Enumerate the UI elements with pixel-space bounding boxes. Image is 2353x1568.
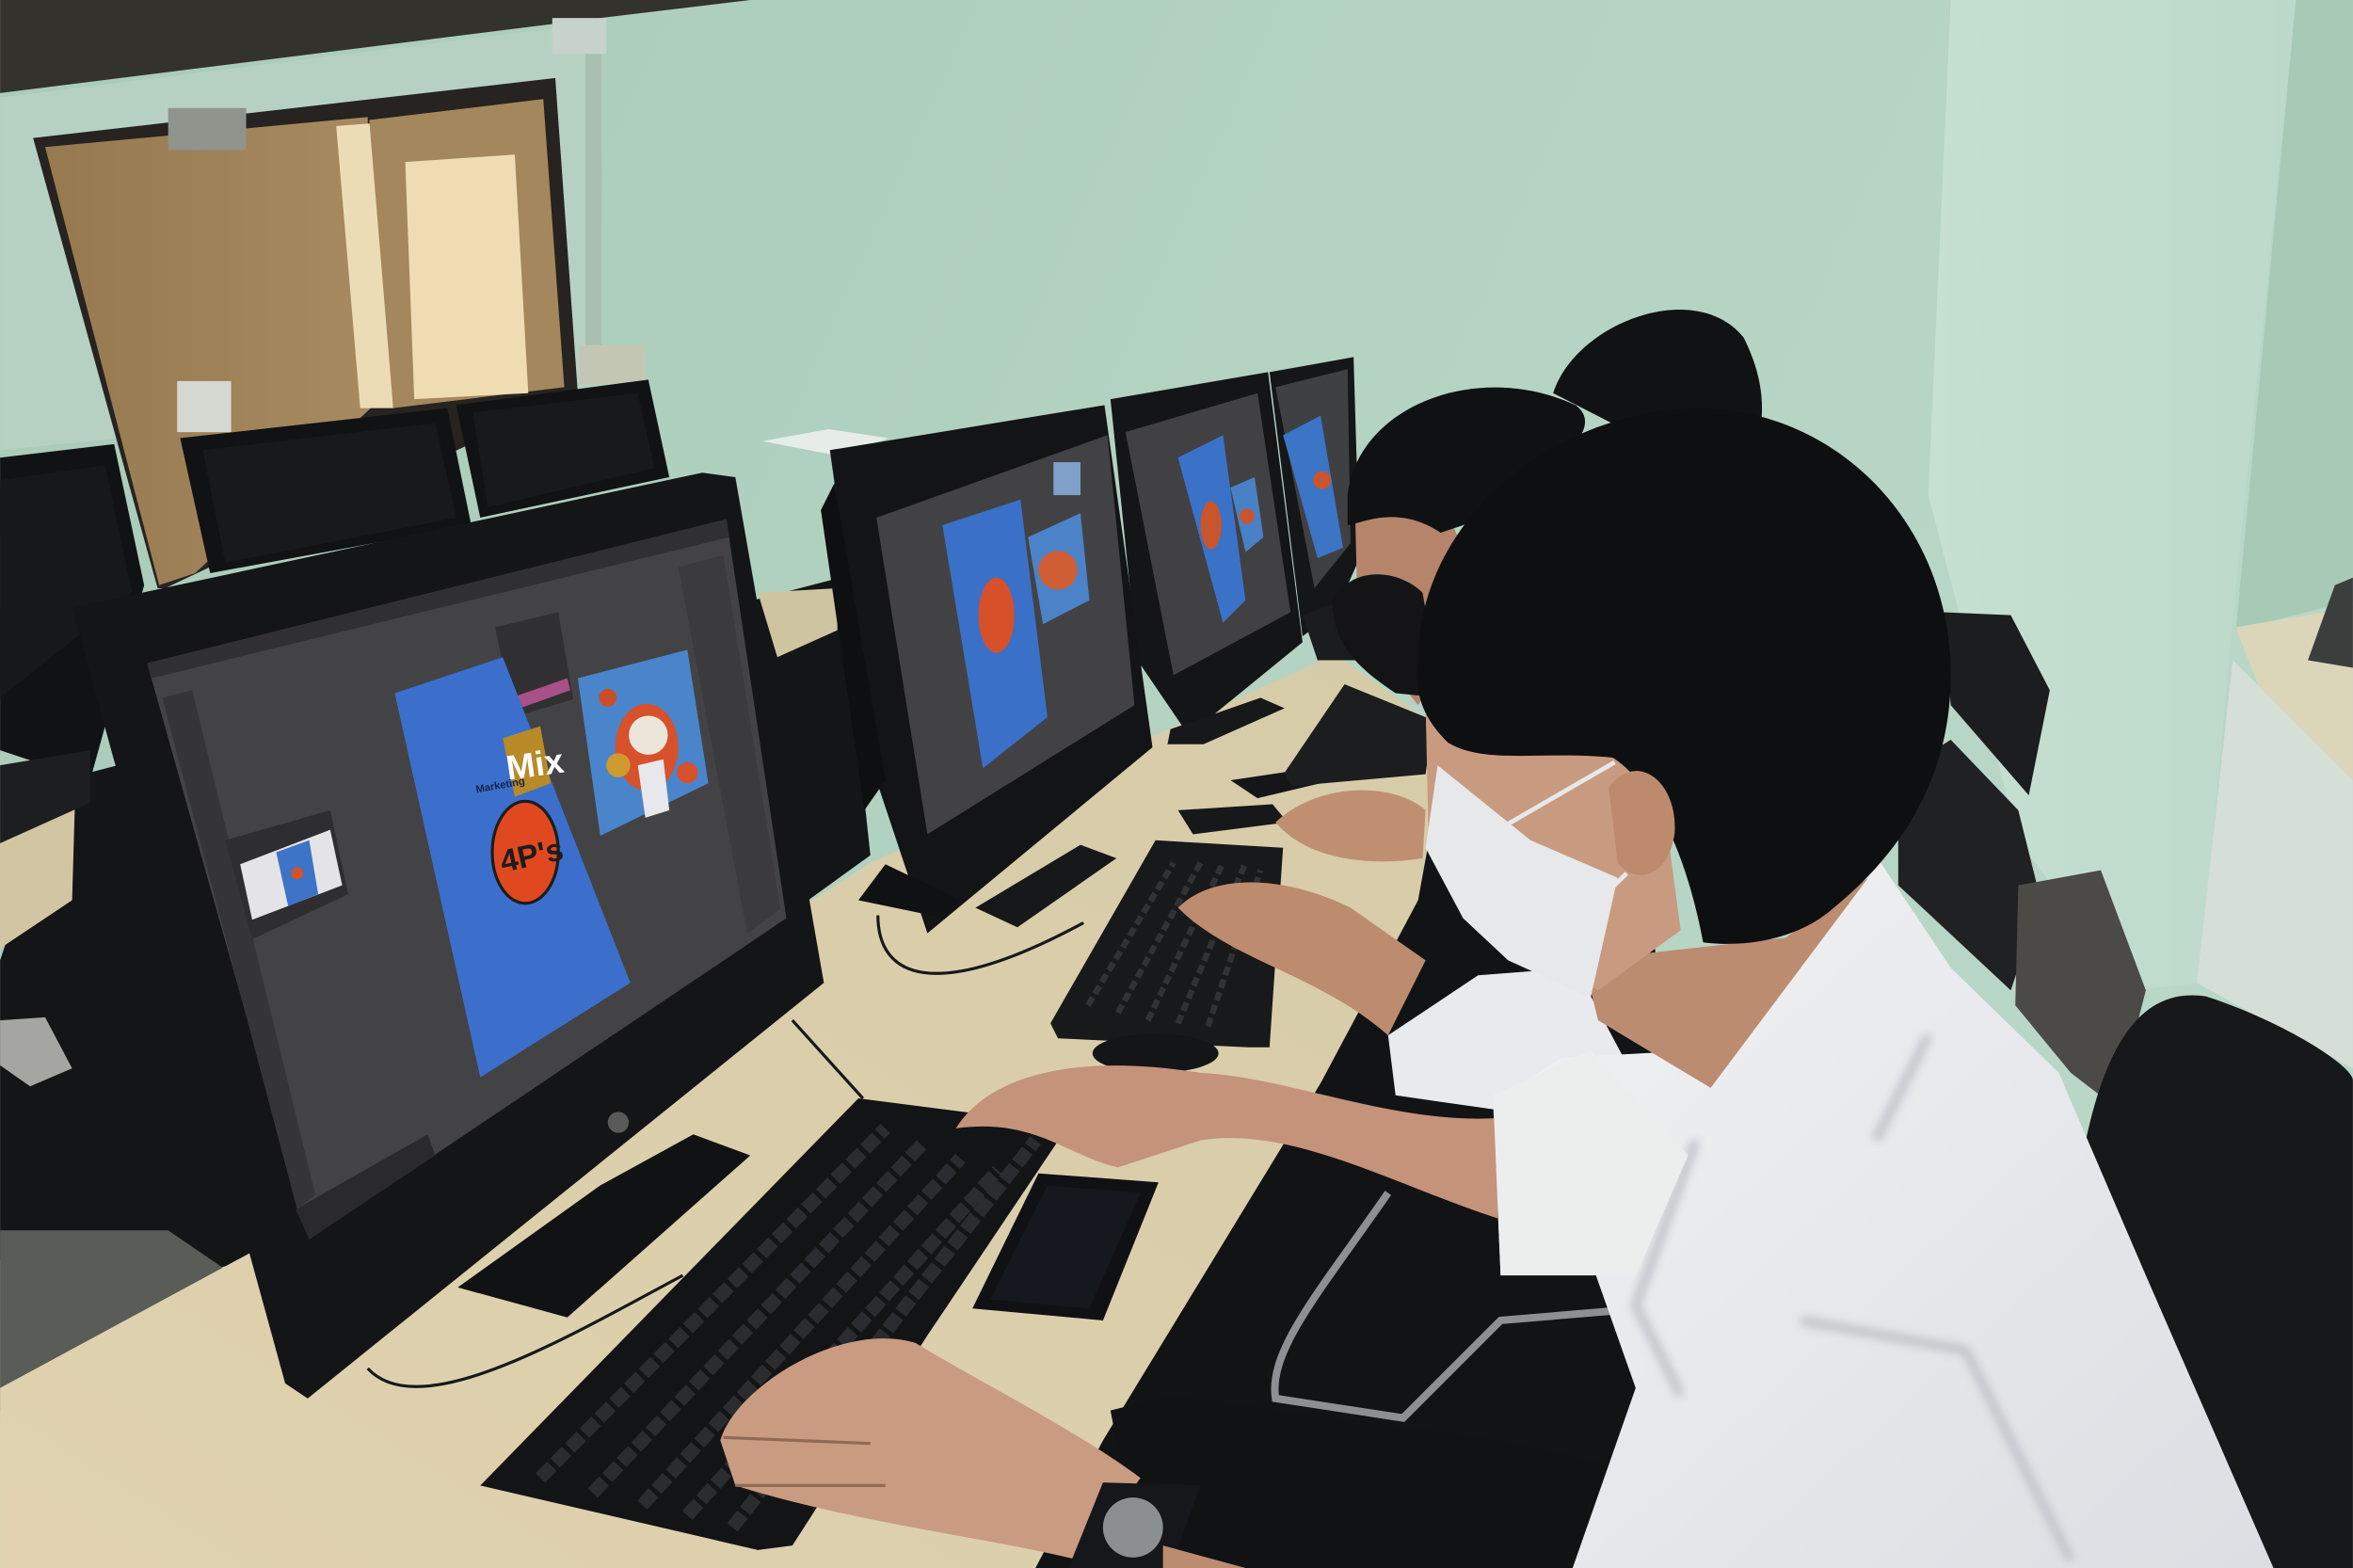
third student hair — [1553, 310, 1762, 427]
red 4Ps circle: 4P's — [497, 832, 567, 880]
long desk — [0, 654, 1449, 1568]
color panel — [495, 612, 573, 717]
pants — [1111, 1396, 1636, 1568]
dark space under desk — [1035, 735, 1681, 1568]
left side wall — [0, 23, 600, 450]
black mask — [1333, 574, 1441, 697]
arm and hand on keyboard — [1178, 883, 1426, 1035]
back chairs — [1898, 612, 2050, 990]
hair — [1348, 388, 1585, 533]
middle keyboard — [1050, 840, 1283, 1048]
second monitor — [821, 405, 1152, 934]
cable on desk — [368, 915, 1083, 1386]
right panel — [679, 555, 780, 934]
fourth monitor — [1270, 357, 1359, 660]
far right wall — [2236, 0, 2353, 631]
logo on bezel — [608, 1112, 629, 1133]
phones on back desk — [1178, 771, 1321, 834]
mid chair frame — [1274, 1192, 1643, 1418]
hair — [1417, 408, 1951, 944]
artboard: blue poster — [394, 657, 631, 1078]
hand on mouse — [1275, 791, 1426, 861]
main keyboard — [480, 1098, 1068, 1550]
back left monitors — [0, 379, 669, 780]
white face mask — [1426, 765, 1618, 998]
lower hand — [720, 1338, 1141, 1560]
shirt — [1493, 856, 2273, 1568]
floor — [0, 1230, 300, 1411]
wristwatch — [1068, 1482, 1201, 1568]
face — [1426, 705, 1681, 990]
mask straps — [1500, 762, 1626, 937]
artboard: finished poster — [578, 649, 709, 836]
taskbar — [296, 1134, 435, 1240]
mix badge: Mix — [504, 742, 567, 788]
dark area under back desks — [0, 578, 871, 1275]
front student — [720, 408, 2273, 1568]
app menu bar — [147, 520, 729, 679]
red 4Ps circle — [492, 801, 567, 904]
main monitor stand — [457, 1134, 750, 1318]
back keyboard — [1285, 684, 1433, 786]
third monitor — [1111, 372, 1303, 744]
navigator panel — [225, 810, 348, 939]
far right desk — [2197, 578, 2353, 1068]
white shirt — [1388, 968, 1636, 1111]
ear — [1609, 771, 1674, 875]
finger gaps — [724, 1437, 886, 1485]
marketing label: Marketing — [475, 776, 526, 795]
neck — [1583, 878, 1868, 1088]
left tool strip — [162, 690, 315, 1209]
paper on monitor — [762, 429, 888, 456]
pipe on wall — [552, 18, 606, 353]
doorway — [33, 78, 646, 588]
mouse on middle desk — [1093, 1033, 1219, 1073]
ceiling band — [0, 0, 750, 93]
right chair — [2086, 995, 2353, 1568]
screen — [147, 520, 786, 1240]
right column — [1929, 0, 2296, 990]
second student — [1178, 388, 1636, 1111]
cuff sleeve — [1493, 1050, 1689, 1275]
face — [1355, 480, 1485, 705]
shirt folds — [1636, 1035, 2071, 1560]
phone on main desk — [972, 1174, 1159, 1320]
mix badge — [503, 727, 567, 797]
main monitor — [72, 472, 824, 1399]
patterned bag — [2015, 871, 2146, 1108]
upper arm and hand — [956, 1065, 1500, 1219]
forearm — [1163, 1545, 1245, 1568]
